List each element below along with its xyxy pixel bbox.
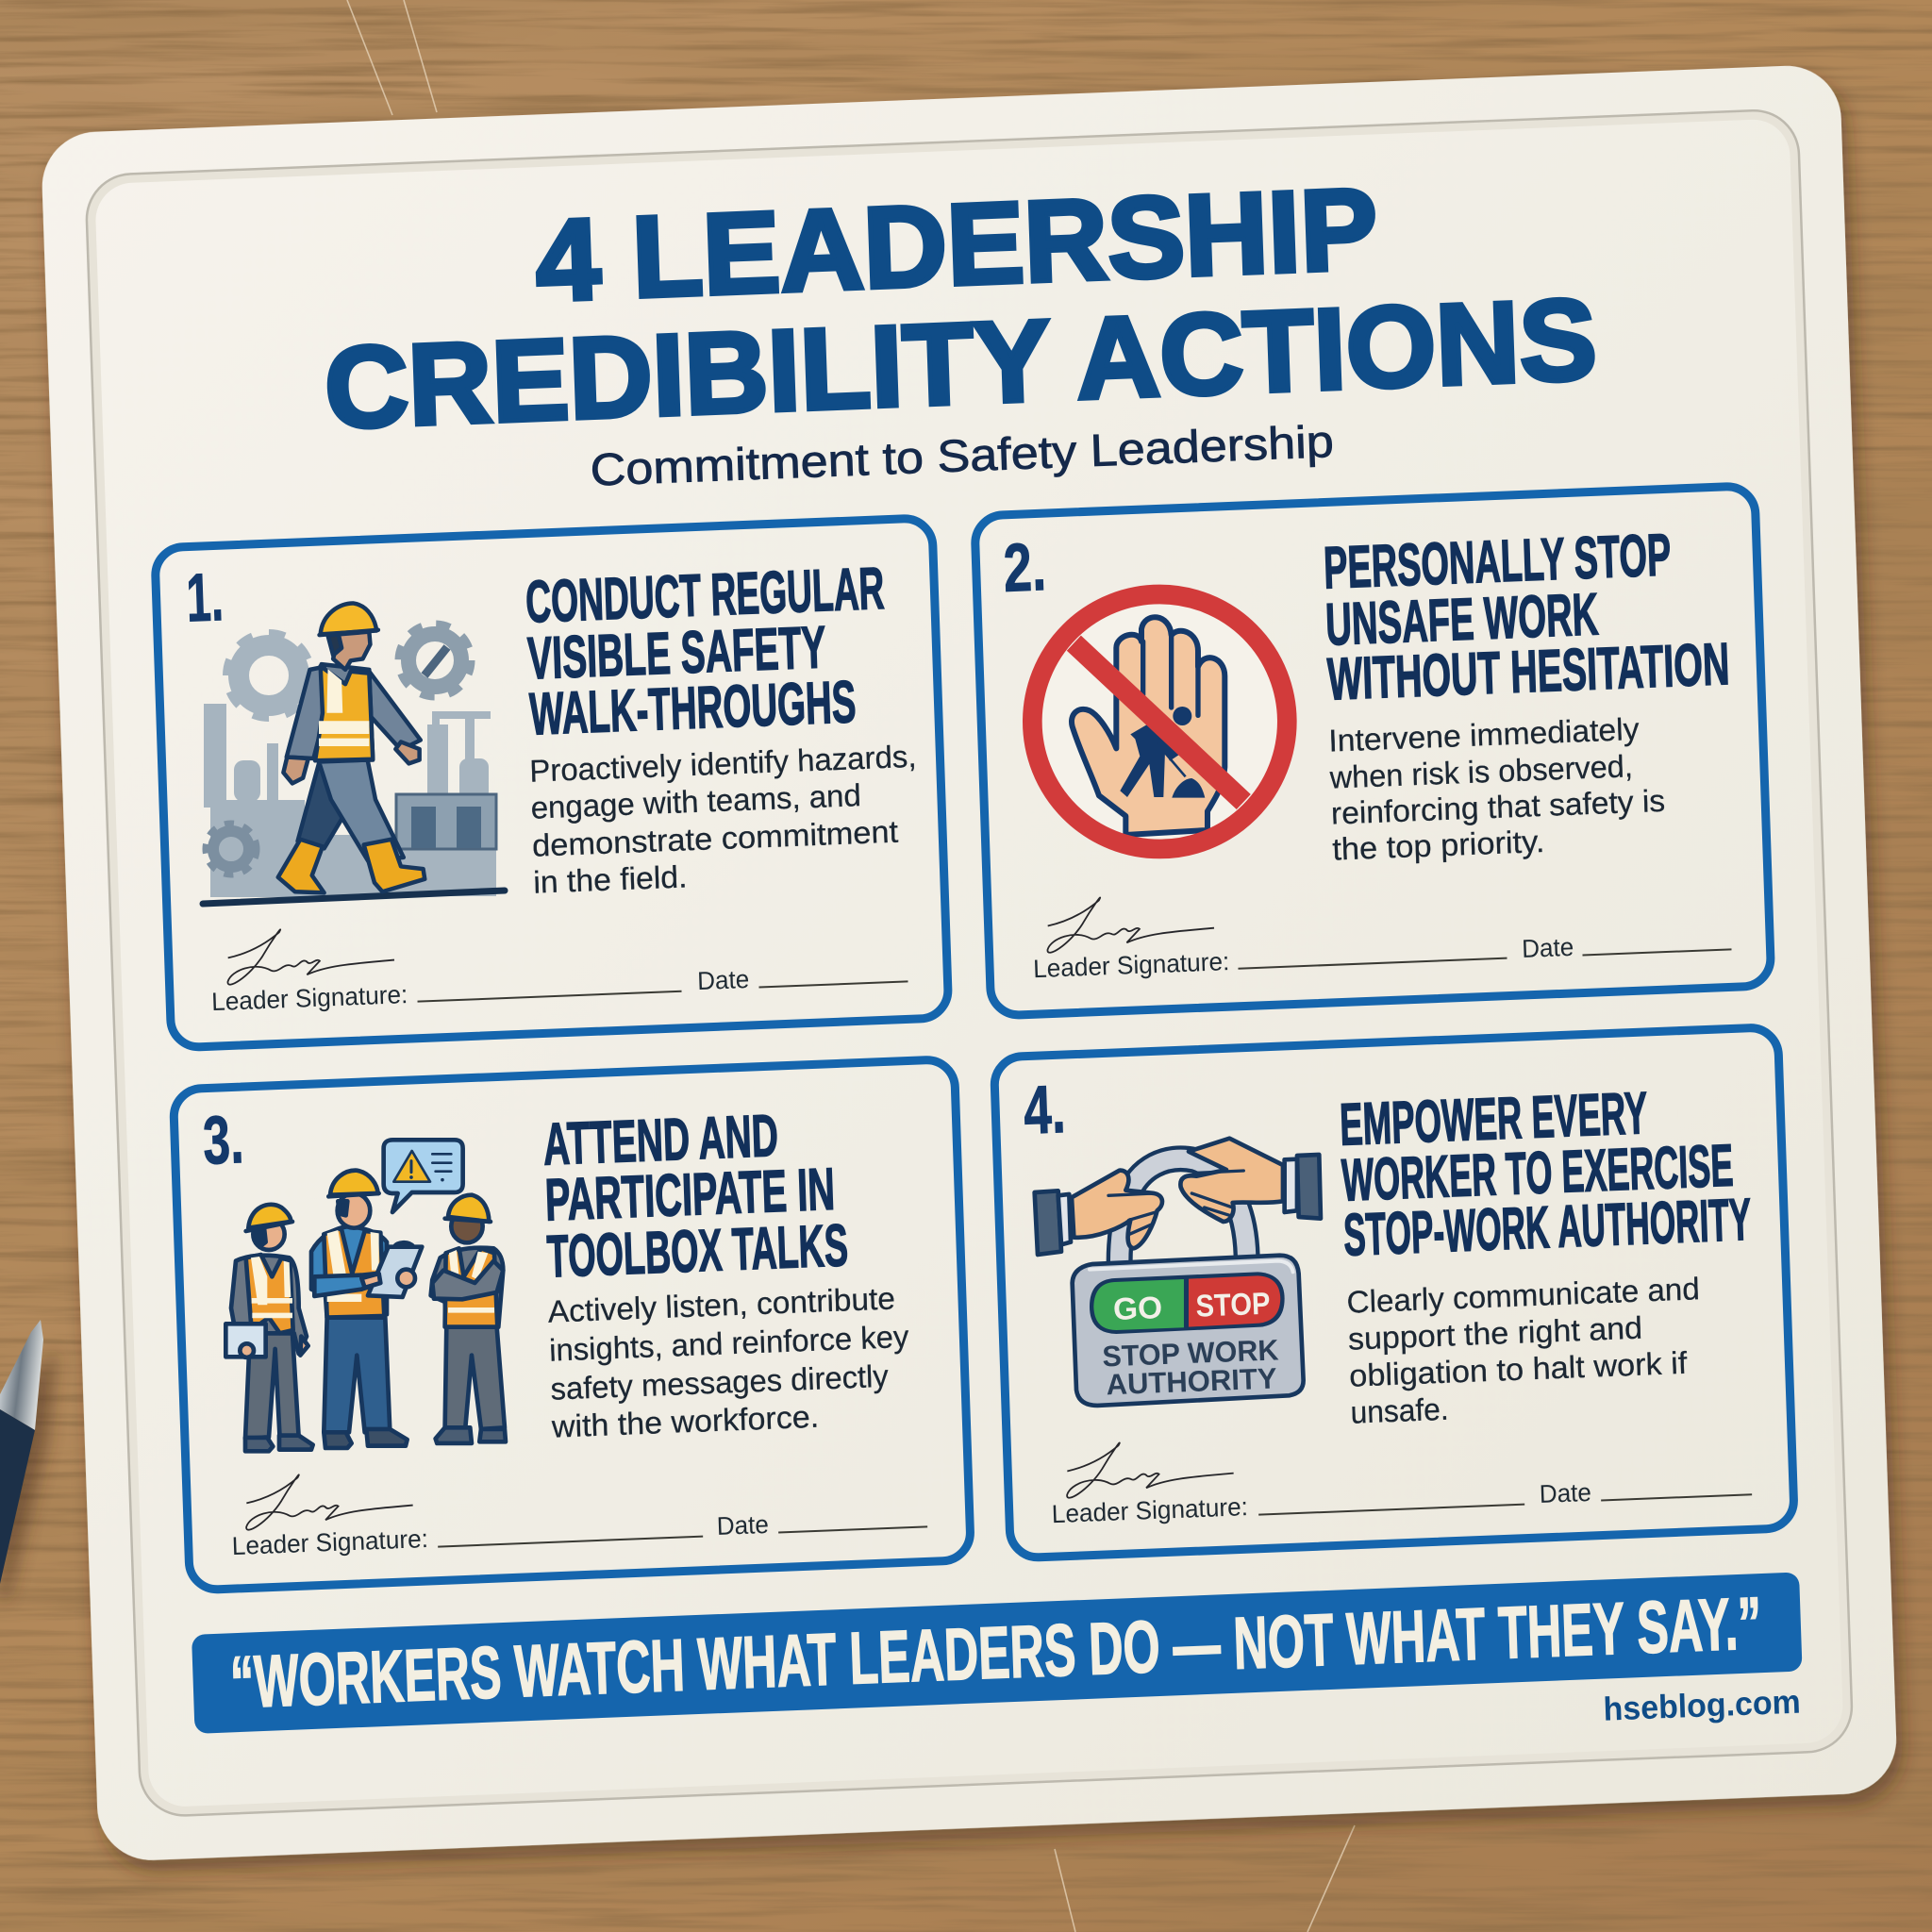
heading — [1339, 1076, 1752, 1269]
card 1 frame and text — [155, 518, 949, 1048]
body text: in the field. — [533, 858, 688, 900]
body text: Actively listen, contribute — [547, 1280, 895, 1329]
heading: EMPOWER EVERY — [1339, 1080, 1648, 1158]
panel: card 3 — [173, 1059, 971, 1591]
title — [319, 155, 1599, 453]
heading: VISIBLE SAFETY — [526, 614, 827, 692]
body text: reinforcing that safety is — [1330, 783, 1666, 831]
heading: PERSONALLY STOP — [1323, 522, 1672, 602]
card 1 frame and text: 1. — [185, 559, 225, 637]
icon: hands on stop work padlock: STOP WORK — [1102, 1333, 1280, 1374]
heading: TOOLBOX TALKS — [546, 1212, 849, 1291]
speech bubble warning — [384, 1140, 463, 1212]
signature row — [209, 906, 908, 1016]
signature row: Leader Signature: — [1033, 947, 1230, 983]
card 2 frame and text: 2. — [1002, 529, 1047, 607]
body text: unsafe. — [1350, 1391, 1449, 1430]
icon: hands on stop work padlock: AUTHORITY — [1106, 1361, 1278, 1401]
panel: card 2 — [974, 486, 1772, 1016]
heading — [525, 556, 890, 748]
heading: WALK-THROUGHS — [528, 669, 858, 748]
signature row: Leader Signature: — [211, 980, 408, 1016]
heading: UNSAFE WORK — [1324, 581, 1599, 658]
body text — [1327, 710, 1667, 867]
heading: ATTEND AND — [542, 1103, 779, 1178]
signature row: Leader Signature: — [1051, 1492, 1248, 1528]
signature row: Leader Signature: — [231, 1524, 428, 1560]
card 2 frame and text — [974, 486, 1772, 1016]
subtitle: Commitment to Safety Leadership — [590, 417, 1335, 496]
heading: PARTICIPATE IN — [544, 1157, 836, 1234]
body text — [1346, 1271, 1704, 1430]
icon: hands on stop work padlock: STOP — [1195, 1286, 1271, 1324]
card 3 frame and text — [173, 1059, 971, 1591]
worker center — [311, 1171, 422, 1448]
panel: card 4 — [993, 1027, 1794, 1558]
signature row: Date — [697, 965, 750, 995]
signature row — [1049, 1418, 1752, 1528]
card 4 frame and text — [993, 1027, 1794, 1558]
heading: CONDUCT REGULAR — [525, 556, 886, 636]
website credit: hseblog.com — [1603, 1684, 1801, 1728]
signature row — [229, 1450, 927, 1560]
body text: with the workforce. — [550, 1399, 820, 1444]
heading — [1323, 520, 1730, 713]
title: 4 LEADERSHIP — [534, 163, 1379, 325]
body text: Clearly communicate and — [1346, 1271, 1700, 1320]
body text: insights, and reinforce key — [549, 1319, 909, 1368]
pen — [0, 1320, 57, 1604]
card 4 frame and text: 4. — [1023, 1072, 1067, 1149]
signature row — [1031, 873, 1732, 983]
worker left — [225, 1205, 313, 1451]
heading — [542, 1100, 849, 1291]
icon: three workers toolbox talk — [225, 1140, 506, 1451]
icon: hands on stop work padlock: GO — [1112, 1290, 1163, 1326]
body text: when risk is observed, — [1328, 748, 1633, 795]
body text: engage with teams, and — [530, 777, 861, 825]
icon: stop hand in prohibition sign — [1032, 594, 1287, 849]
title: CREDIBILITY ACTIONS — [323, 274, 1599, 453]
body text — [546, 1280, 912, 1444]
body text: the top priority. — [1332, 824, 1545, 867]
signature row: Date — [1522, 933, 1574, 963]
body text — [529, 739, 921, 900]
body text: safety messages directly — [550, 1358, 890, 1407]
card 3 frame and text: 3. — [202, 1102, 245, 1179]
icon: hands on stop work padlock — [1035, 1139, 1321, 1406]
body text: obligation to halt work if — [1349, 1345, 1689, 1393]
signature row: Date — [716, 1510, 769, 1541]
worker right — [431, 1195, 506, 1443]
panel: card 1 — [155, 518, 949, 1048]
body text: Proactively identify hazards, — [529, 739, 917, 789]
body text: support the right and — [1347, 1310, 1643, 1357]
signature row: Date — [1539, 1478, 1591, 1508]
icon: walking worker in factory — [203, 603, 505, 904]
body text: demonstrate commitment — [531, 814, 899, 863]
body text: Intervene immediately — [1328, 711, 1641, 758]
